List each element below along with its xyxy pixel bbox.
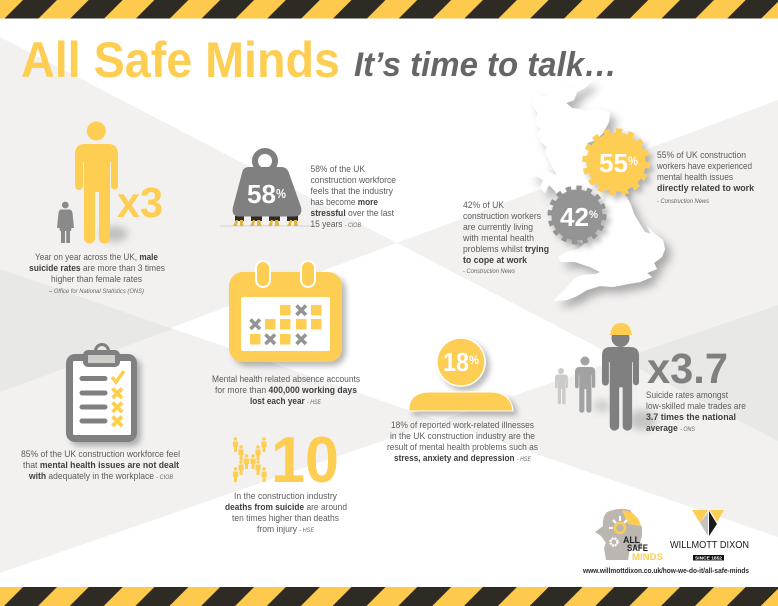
text: 58%: feels that the industry (310, 185, 393, 196)
text: absence: lost each year - HSE (250, 395, 322, 406)
icon: person with 18% head: % (469, 353, 479, 367)
logo: All Safe Minds: ALL (623, 535, 640, 545)
text: 85%: with adequately in the workplace - CIOB (28, 470, 173, 481)
text: 18%: 18% of reported work-related illnesses (391, 419, 534, 430)
icon: weight carried by workers: % (276, 186, 286, 201)
text: x3.7: low-skilled male trades are (646, 400, 746, 411)
panel: clipboard 85% (21, 344, 180, 481)
text: 42%: problems whilst trying (463, 243, 549, 254)
text: male suicide rates: suicide rates are more than 3 times (29, 262, 165, 273)
text: deaths from suicide: deaths from suicide are around (225, 501, 347, 512)
text: 58% (310, 163, 396, 229)
text: deaths from suicide: In the construction industry (234, 490, 337, 501)
gear: 55% (586, 132, 646, 192)
text: 18%: result of mental health problems such as (387, 441, 538, 452)
text: x3.7: average - ONS (646, 422, 695, 433)
text: male suicide rates: – Office for National Statistics (ONS) (48, 289, 144, 295)
hazard stripe bottom (0, 587, 778, 606)
panel: x10 deaths (225, 423, 347, 534)
18%: 18 (443, 347, 469, 377)
icon: calendar (229, 261, 342, 362)
text: 85% (21, 448, 180, 481)
text: deaths from suicide: ten times higher than deaths (232, 512, 339, 523)
x3.7 figure: x3.7 (647, 345, 728, 393)
gear: 55%: % (628, 154, 638, 168)
panel: 58% stressful (220, 151, 396, 229)
x3 figure: x3 (117, 179, 163, 227)
text: 55%: - Construction News (657, 199, 709, 205)
icon: large yellow man (75, 122, 118, 244)
text: absence: for more than 400,000 working days (215, 384, 357, 395)
55%: 55 (599, 148, 628, 178)
text: absence: Mental health related absence accounts (212, 373, 360, 384)
logo: All Safe Minds (595, 509, 663, 562)
text: male suicide rates: higher than female rates (51, 273, 142, 284)
icon: weight carried by workers (220, 151, 312, 226)
text: male suicide rates (29, 251, 165, 295)
text: 55%: workers have experienced (656, 160, 752, 171)
text: 55% (656, 149, 755, 205)
title (21, 32, 617, 88)
icon: small man (555, 368, 568, 404)
text: 42%: are currently living (463, 221, 533, 232)
text: 58%: construction workforce (310, 174, 396, 185)
subtitle: It's time to talk: It’s time to talk… (354, 46, 617, 84)
panel: 18% work-related illnesses (387, 338, 538, 463)
text: 42% (462, 199, 549, 275)
icon: small grey woman (57, 202, 74, 243)
panel: male suicide rates x3 (29, 122, 165, 295)
icon: person with 18% head (409, 338, 513, 411)
logo: All Safe Minds: SAFE (627, 543, 648, 553)
text: deaths from suicide: from injury - HSE (257, 523, 315, 534)
text: 55%: 55% of UK construction (657, 149, 746, 160)
text: 58%: 58% of the UK (310, 163, 366, 174)
logo: Willmott Dixon: SINCE 1852 (695, 556, 722, 562)
text: 85%: 85% of the UK construction workforce feel (21, 448, 180, 459)
figure: 10: 10 (271, 423, 339, 496)
panel: UK map with gears (462, 80, 755, 301)
text: x3.7: 3.7 times the national (646, 411, 736, 422)
text: 42%: to cope at work (463, 254, 528, 265)
42%: 42 (560, 202, 589, 232)
text: absence (212, 373, 360, 406)
text: 42%: 42% of UK (463, 199, 505, 210)
title: All Safe Minds: All Safe Minds (21, 32, 340, 88)
logo: Willmott Dixon: WILLMOTT DIXON (670, 539, 749, 551)
text: 18%: in the UK construction industry are the (390, 430, 535, 441)
map of Great Britain (528, 80, 665, 301)
text: 42%: - Construction News (463, 269, 515, 275)
text: 85%: that mental health issues are not dealt (23, 459, 179, 470)
icon: medium man (575, 356, 595, 413)
panel: x3.7 low-skilled trades (555, 323, 746, 433)
hazard stripe top (0, 0, 778, 18)
text: 55%: mental health issues (657, 171, 733, 182)
icon: clipboard (66, 344, 137, 442)
text: 58%: stressful over the last (310, 207, 394, 218)
logo: Willmott Dixon (670, 510, 749, 562)
58%: 58 (247, 179, 276, 209)
icon: X made of small people (233, 437, 267, 482)
gear: 42%: % (589, 209, 598, 221)
text: x3.7: Suicide rates amongst (646, 389, 728, 400)
text: 42%: construction workers (463, 210, 541, 221)
icon: large man with hard hat (602, 323, 639, 431)
text: deaths from suicide (225, 490, 347, 534)
text: 42%: with mental health (462, 232, 534, 243)
logo: All Safe Minds: MINDS (632, 552, 663, 562)
text: x3.7 (646, 389, 746, 433)
panel: calendar 400,000 days (212, 261, 360, 406)
text: 55%: directly related to work (657, 182, 755, 193)
text: 18% (387, 419, 538, 463)
website URL: www.willmottdixon.co.uk/how-we-do-it/all-safe-minds (582, 568, 749, 575)
text: 18%: stress, anxiety and depression - HSE (394, 452, 532, 463)
text: male suicide rates: Year on year across the UK, male (35, 251, 158, 262)
gear: 42% (550, 188, 604, 242)
text: 58%: 15 years - CIOB (310, 218, 361, 229)
text: 58%: has become more (310, 196, 378, 207)
